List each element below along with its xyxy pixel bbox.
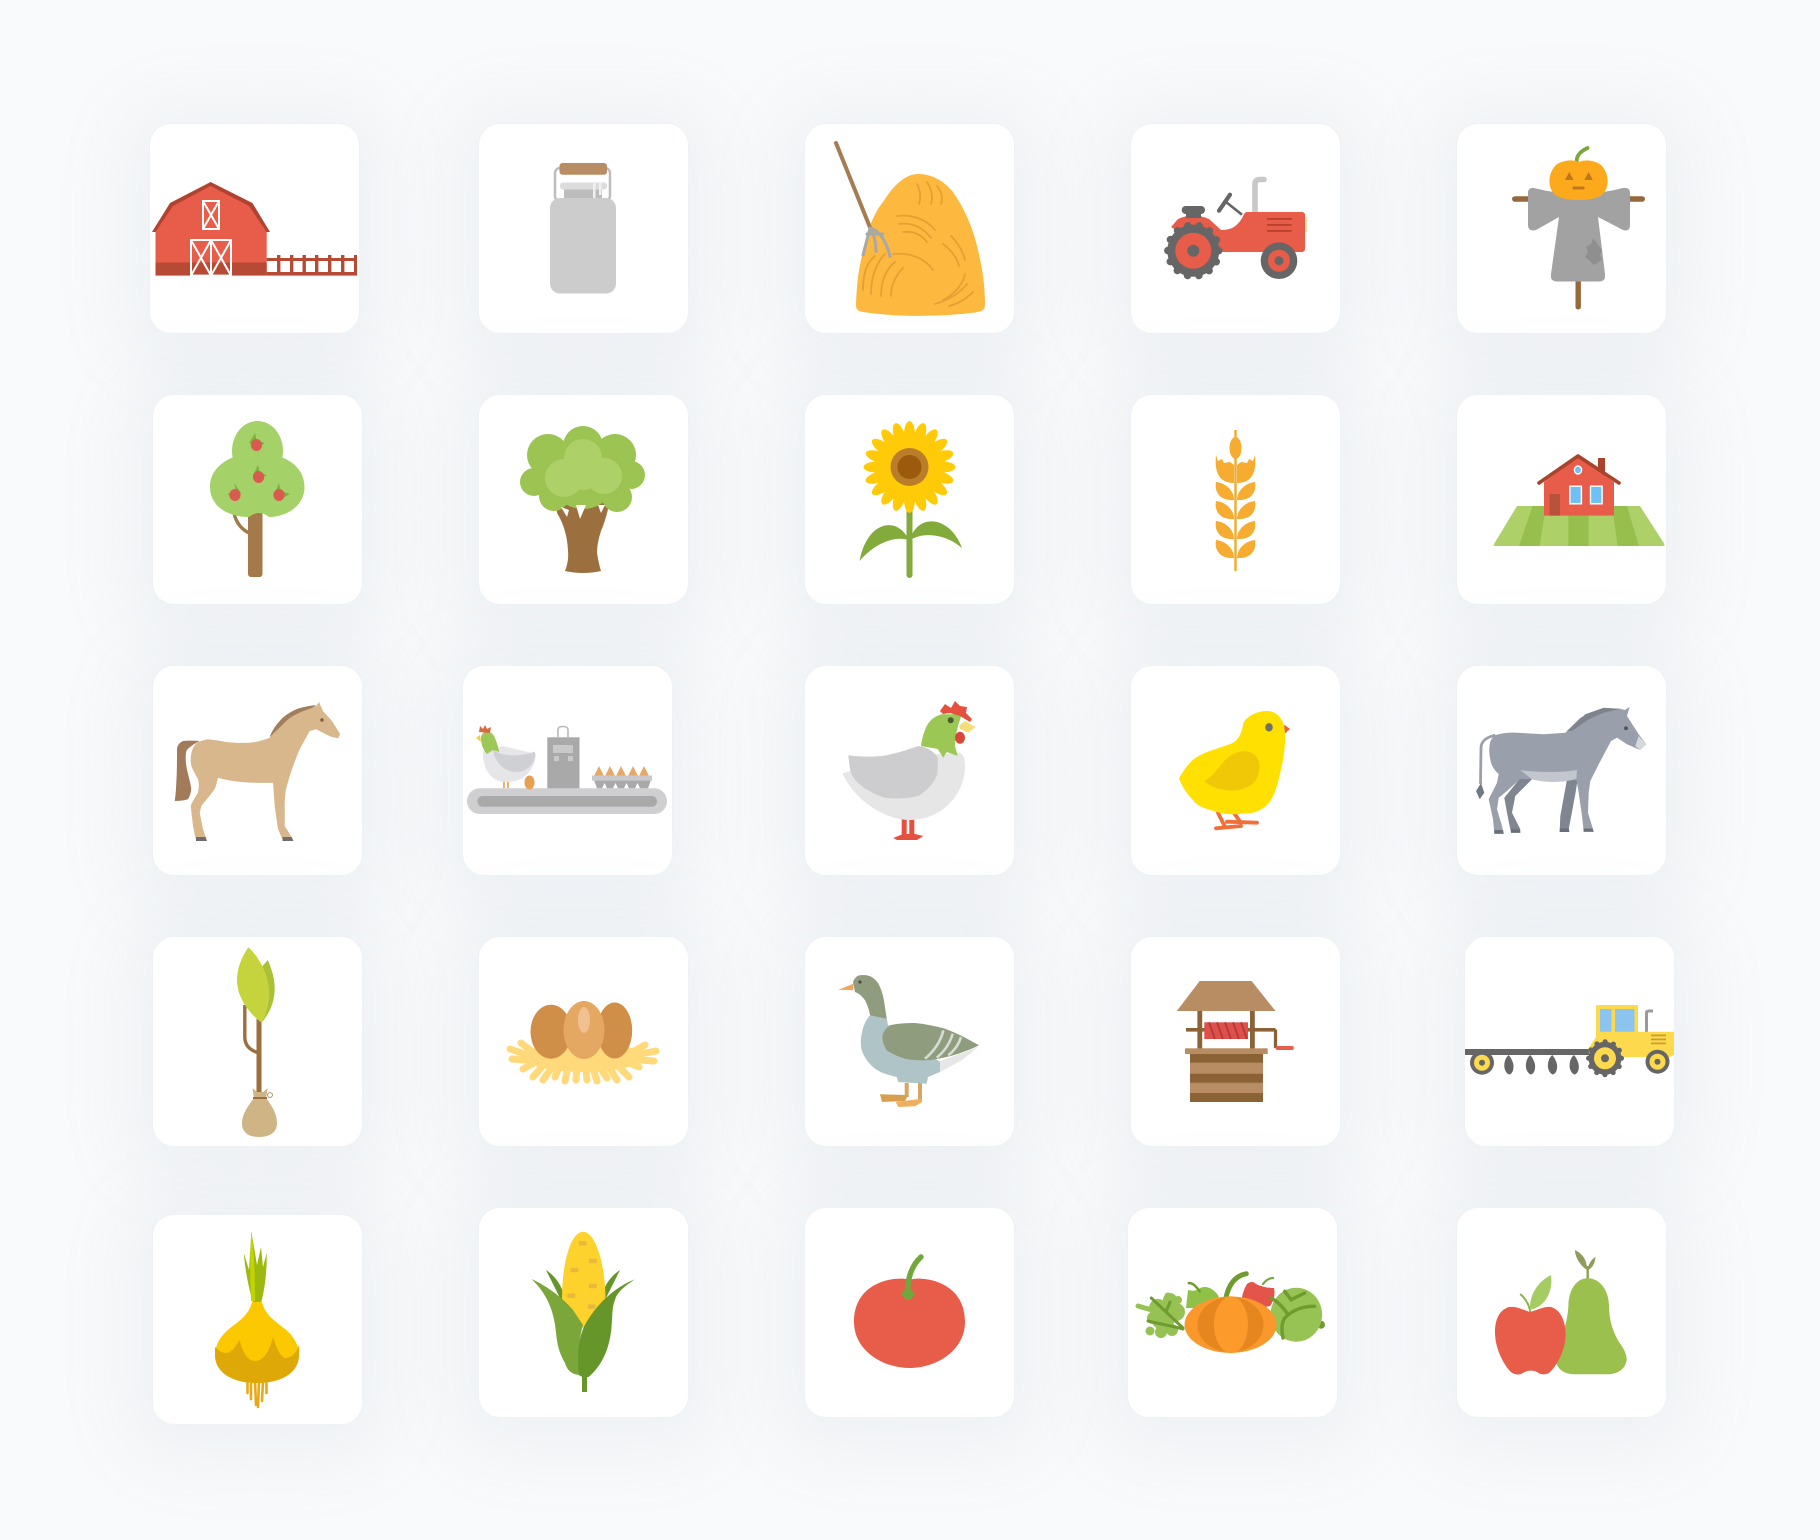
icon: egg production line xyxy=(467,725,667,814)
icon: vegetable group xyxy=(1136,1271,1325,1354)
icon: onion xyxy=(215,1232,300,1408)
icon: eggs in nest xyxy=(506,1001,660,1084)
icon: red tractor xyxy=(1164,176,1308,280)
icon: tomato xyxy=(854,1254,965,1368)
panel: apple and pear card xyxy=(1456,1207,1667,1418)
icon: yellow tractor with plow xyxy=(1465,1005,1674,1078)
panel: farmhouse card xyxy=(1456,394,1667,605)
icon: sunflower xyxy=(860,421,962,578)
icon: donkey xyxy=(1476,706,1646,834)
panel: egg production card xyxy=(462,665,672,876)
icon: farmhouse on field xyxy=(1494,454,1664,546)
panel: tomato card xyxy=(804,1207,1015,1418)
icon: scarecrow with pumpkin head xyxy=(1512,146,1645,310)
panel: apple tree card xyxy=(152,394,363,605)
panel: corn card xyxy=(478,1207,689,1418)
icon: corn cob xyxy=(532,1232,635,1392)
panel: barn card xyxy=(149,123,360,334)
panel: horse card xyxy=(152,665,363,876)
icon: hen xyxy=(842,701,976,840)
icon: yellow chick xyxy=(1179,711,1290,830)
panel: plow tractor card xyxy=(1464,936,1675,1147)
icon: goose xyxy=(838,975,979,1107)
icon: broad leaf tree xyxy=(520,426,645,573)
panel: goose card xyxy=(804,936,1015,1147)
icon: water well xyxy=(1176,981,1294,1102)
panel: donkey card xyxy=(1456,665,1667,876)
panel: vegetables card xyxy=(1126,1207,1338,1418)
panel: hen card xyxy=(804,665,1015,876)
panel: sunflower card xyxy=(804,394,1015,605)
icon: red barn with fence xyxy=(152,182,357,276)
panel: chick card xyxy=(1130,665,1341,876)
icon: haystack and pitchfork xyxy=(834,140,985,316)
panel: onion card xyxy=(152,1214,363,1425)
panel: oak tree card xyxy=(478,394,689,605)
icon: seedling in sack xyxy=(237,947,277,1137)
panel: wheat card xyxy=(1130,394,1341,605)
panel: water well card xyxy=(1130,936,1341,1147)
icon: wheat ear xyxy=(1216,430,1256,571)
panel: red tractor card xyxy=(1130,123,1341,334)
panel: haystack card xyxy=(804,123,1015,334)
panel: scarecrow card xyxy=(1456,123,1667,334)
panel: seedling card xyxy=(152,936,363,1147)
icon: milk can xyxy=(550,163,616,294)
icon: apple and pear xyxy=(1495,1250,1627,1374)
panel: milk can card xyxy=(478,123,689,334)
panel: eggs in nest card xyxy=(478,936,689,1147)
icon: apple tree xyxy=(210,421,304,577)
icon: horse xyxy=(174,702,340,841)
